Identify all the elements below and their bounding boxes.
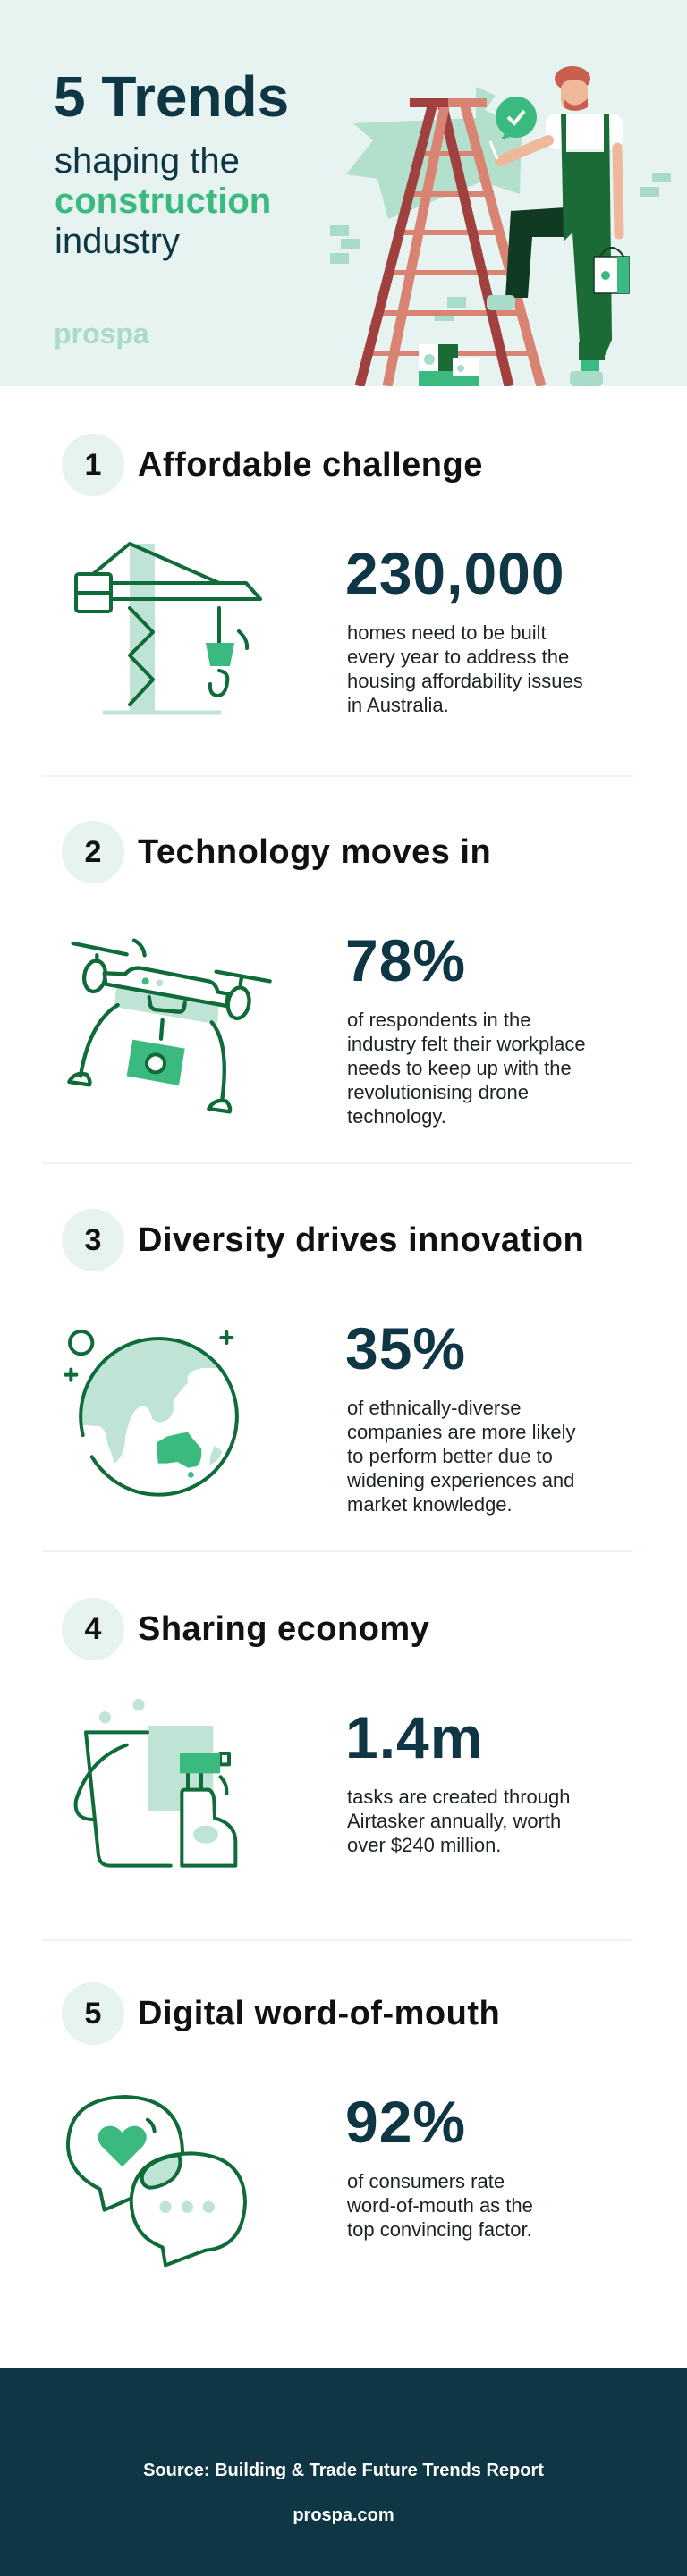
website: prospa.com (293, 2505, 394, 2525)
icon: drone (67, 939, 272, 1114)
stat 2: 78% (345, 927, 466, 993)
icon: crane (74, 542, 263, 715)
text 4 (347, 1786, 570, 1856)
icon: globe (64, 1330, 239, 1497)
heading 4: Sharing economy (138, 1610, 429, 1648)
source text: Source: Building & Trade Future Trends Report (143, 2461, 544, 2480)
number badge 3 (62, 1209, 124, 1271)
icon: bucket and spray (73, 1699, 238, 1868)
stat 5: 92% (345, 2089, 466, 2155)
number badge 2 (62, 821, 124, 883)
number badge 1 (62, 434, 124, 496)
stat 1: 230,000 (345, 540, 565, 606)
text 2: technology. (347, 1105, 446, 1128)
text 5 (347, 2170, 533, 2241)
text 5: of consumers rate (347, 2170, 505, 2192)
text 3: companies are more likely (347, 1421, 576, 1443)
text 3: to perform better due to (347, 1445, 553, 1467)
subtitle: construction (55, 182, 271, 221)
text 4: tasks are created through (347, 1786, 570, 1808)
text 1: housing affordability issues (347, 670, 583, 692)
number badge 1: 1 (85, 448, 101, 482)
icon: chat bubbles (66, 2095, 247, 2268)
text 1: every year to address the (347, 646, 569, 668)
number badge 5: 5 (85, 1997, 101, 2031)
text 4: over $240 million. (347, 1834, 501, 1856)
subtitle (55, 141, 271, 261)
text 5: word-of-mouth as the (347, 2194, 533, 2217)
text 1: homes need to be built (347, 621, 547, 644)
text 1 (347, 621, 583, 716)
text 2: needs to keep up with the (347, 1057, 572, 1079)
subtitle: shaping the (55, 141, 240, 181)
stat 3: 35% (345, 1315, 466, 1381)
text 1: in Australia. (347, 694, 449, 716)
footer (0, 2368, 687, 2576)
subtitle: industry (55, 222, 180, 261)
heading 2: Technology moves in (138, 833, 491, 871)
heading 1: Affordable challenge (138, 446, 483, 484)
text 5: top convincing factor. (347, 2218, 532, 2241)
number badge 4: 4 (85, 1612, 101, 1646)
text 2 (347, 1009, 586, 1128)
text 2: industry felt their workplace (347, 1033, 586, 1055)
text 3: widening experiences and (347, 1469, 574, 1491)
text 2: revolutionising drone (347, 1081, 529, 1103)
title: 5 Trends (54, 64, 289, 129)
text 3: of ethnically-diverse (347, 1397, 521, 1419)
text 3: market knowledge. (347, 1493, 513, 1516)
heading 5: Digital word-of-mouth (138, 1995, 500, 2032)
logo: prospa: prospa (54, 317, 149, 350)
illustration: worker on ladder (330, 66, 671, 386)
text 2: of respondents in the (347, 1009, 530, 1031)
header panel (0, 0, 687, 386)
number badge 2: 2 (85, 835, 101, 869)
heading 3: Diversity drives innovation (138, 1221, 584, 1259)
stat 4: 1.4m (345, 1704, 483, 1770)
text 4: Airtasker annually, worth (347, 1810, 561, 1832)
number badge 4 (62, 1598, 124, 1660)
number badge 5 (62, 1982, 124, 2045)
text 3 (347, 1397, 576, 1516)
number badge 3: 3 (85, 1223, 101, 1257)
